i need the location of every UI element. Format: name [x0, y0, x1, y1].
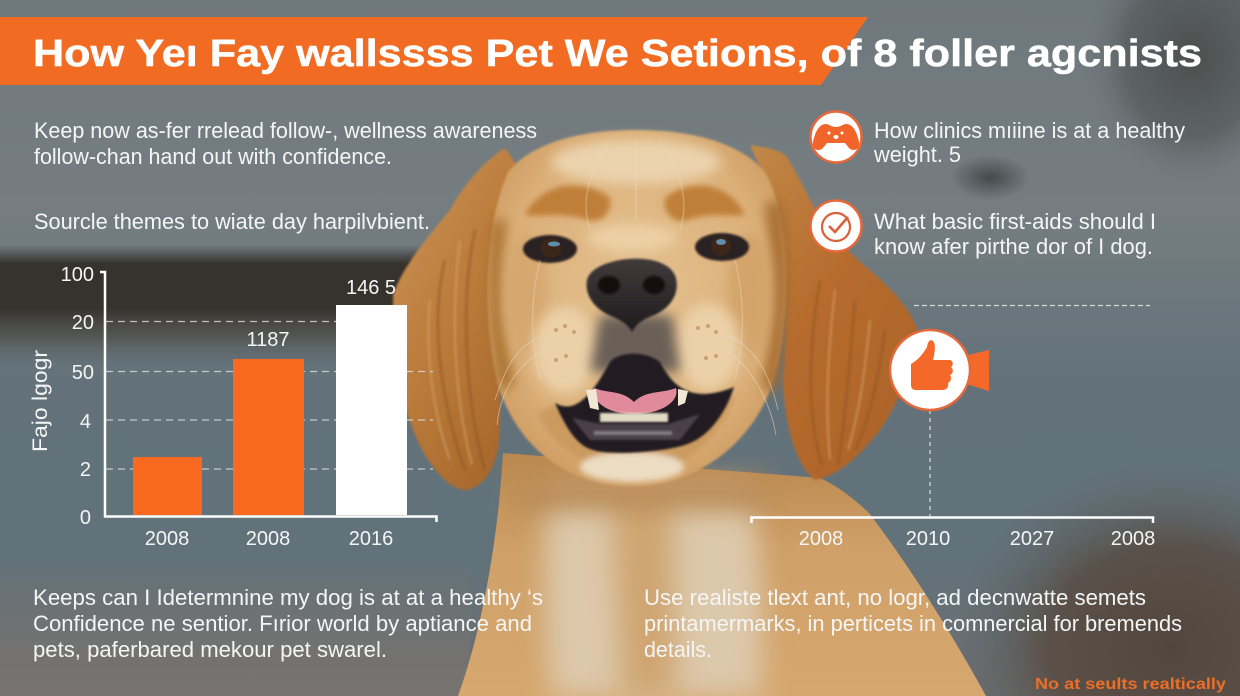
y axis labels: [61, 264, 94, 529]
ear fur strands: [438, 230, 885, 470]
timeline axis: [752, 518, 1153, 523]
bar 1: [133, 457, 202, 515]
question text two: know afer pirthe dor of I dog.: [874, 234, 1153, 259]
dog portrait: [393, 130, 986, 696]
title: How Yeı Fay wallssss Pet We Setions, of 8 foller agcnists: [33, 33, 1202, 75]
x axis labels: [145, 528, 393, 550]
right timeline chart: [752, 306, 1155, 550]
y axis labels: 100: [61, 264, 94, 286]
y axis labels: 4: [80, 411, 91, 433]
y axis labels: 0: [80, 507, 91, 529]
bottom right text: details.: [644, 637, 712, 662]
bar value labels: 146 5: [346, 277, 396, 299]
head fur strands: [532, 140, 742, 380]
muzzle: [533, 224, 740, 394]
head side shading: [489, 200, 788, 395]
x axis labels: 2016: [349, 528, 393, 550]
cheek shading: [503, 233, 772, 357]
nose: [587, 259, 677, 332]
brow markings: [525, 185, 745, 221]
chart axes: [100, 272, 436, 522]
bottom left text: Keeps can I Idetermnine my dog is at at a healthy ‘s: [33, 585, 543, 610]
timeline labels: [799, 528, 1155, 550]
ear highlight strands: [428, 240, 870, 465]
eyes: [523, 233, 749, 263]
y axis labels: 20: [72, 312, 94, 334]
x axis labels: 2008: [246, 528, 290, 550]
chin and jaw: [538, 395, 735, 482]
timeline labels: 2010: [906, 528, 950, 550]
bar chart: [29, 264, 436, 550]
bottom right text: printamermarks, in perticets in comnercial for bremends: [644, 611, 1182, 636]
timeline labels: 2008: [799, 528, 843, 550]
bottom left text: [33, 585, 543, 662]
bottom right text: Use realiste tlext ant, no logr, ad decnwatte semets: [644, 585, 1146, 610]
bottom left text: Confidence ne sentior. Fırior world by aptiance and: [33, 611, 532, 636]
intro text: follow-chan hand out with confidence.: [34, 144, 392, 169]
icon: check badge: [810, 200, 862, 252]
mouth: [555, 354, 734, 453]
dog body and chest: [458, 453, 986, 696]
y axis labels: 50: [72, 362, 94, 384]
forehead highlight: [551, 140, 721, 184]
question text one: weight. 5: [873, 142, 961, 167]
intro text: [34, 118, 537, 169]
bottom left text: pets, paferbared mekour pet swarel.: [33, 637, 387, 662]
y axis labels: 2: [80, 459, 91, 481]
bottom right text: [644, 585, 1182, 662]
x axis labels: 2008: [145, 528, 189, 550]
bar 3: [336, 305, 407, 515]
icon: thumbs up marker: [890, 330, 989, 410]
subheading text: Sourcle themes to wiate day harpilvbient.: [34, 209, 430, 234]
right ear: [750, 145, 917, 480]
question text two: What basic first-aids should I: [874, 209, 1156, 234]
timeline labels: 2027: [1010, 528, 1054, 550]
icon: game controller: [810, 112, 862, 162]
left ear: [393, 148, 520, 490]
bar value labels: 1187: [246, 329, 290, 351]
bar 2: [233, 359, 304, 515]
question text one: [873, 118, 1185, 167]
bar value labels: [246, 277, 396, 351]
title banner: [0, 17, 1202, 85]
question text one: How clinics mıiine is at a healthy: [874, 118, 1185, 143]
footer note: No at seults realtically: [1035, 676, 1226, 693]
head: [488, 130, 786, 486]
whiskers: [495, 335, 778, 435]
question text two: [874, 209, 1156, 259]
y axis title: Fajo lgogr: [29, 350, 52, 452]
intro text: Keep now as-fer rrelead follow-, wellness awareness: [34, 118, 537, 143]
timeline labels: 2008: [1111, 528, 1155, 550]
